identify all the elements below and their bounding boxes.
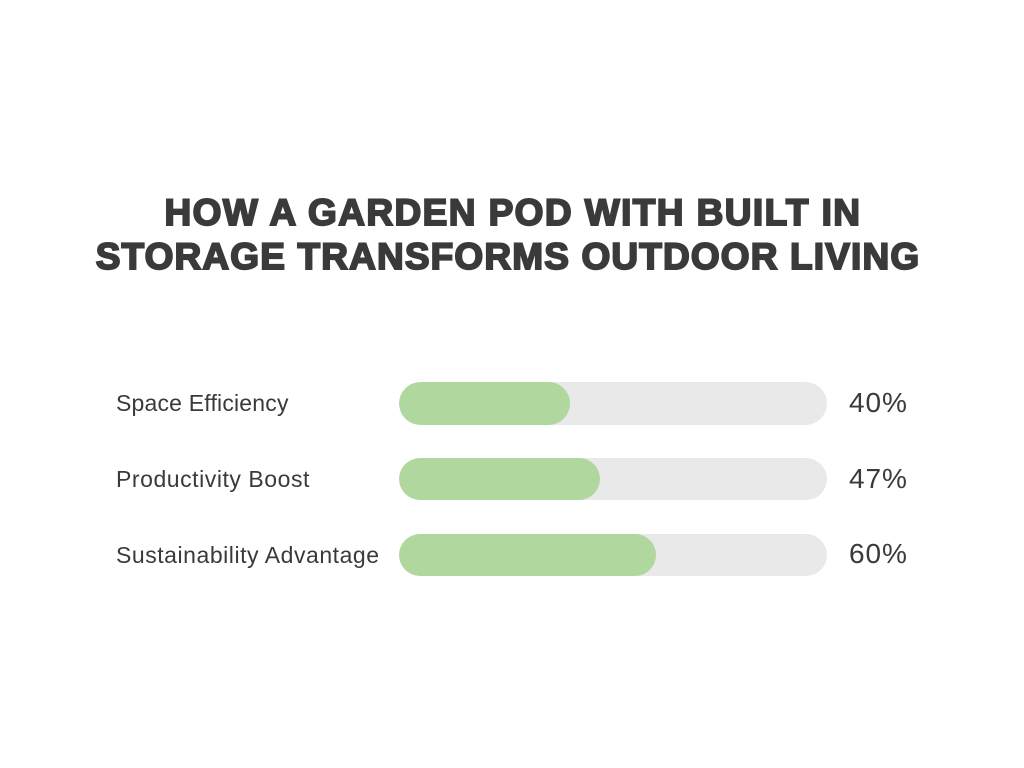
value: 40%: 40% (849, 387, 908, 418)
label: Sustainability Advantage: Sustainability Advantage (116, 542, 380, 568)
title: STORAGE TRANSFORMS OUTDOOR LIVING (96, 236, 920, 277)
row: Space Efficiency (116, 382, 908, 425)
bar: 40% (399, 382, 827, 425)
row: Sustainability Advantage (116, 534, 908, 576)
bar: 60% (399, 534, 827, 576)
value: 60%: 60% (849, 538, 908, 569)
label: Space Efficiency: Space Efficiency (116, 390, 289, 416)
label: Productivity Boost: Productivity Boost (116, 466, 310, 492)
value: 47%: 47% (849, 463, 908, 494)
title: HOW A GARDEN POD WITH BUILT IN (165, 192, 861, 233)
row: Productivity Boost (116, 458, 908, 500)
bar: 47% (399, 458, 827, 500)
title (96, 192, 920, 277)
